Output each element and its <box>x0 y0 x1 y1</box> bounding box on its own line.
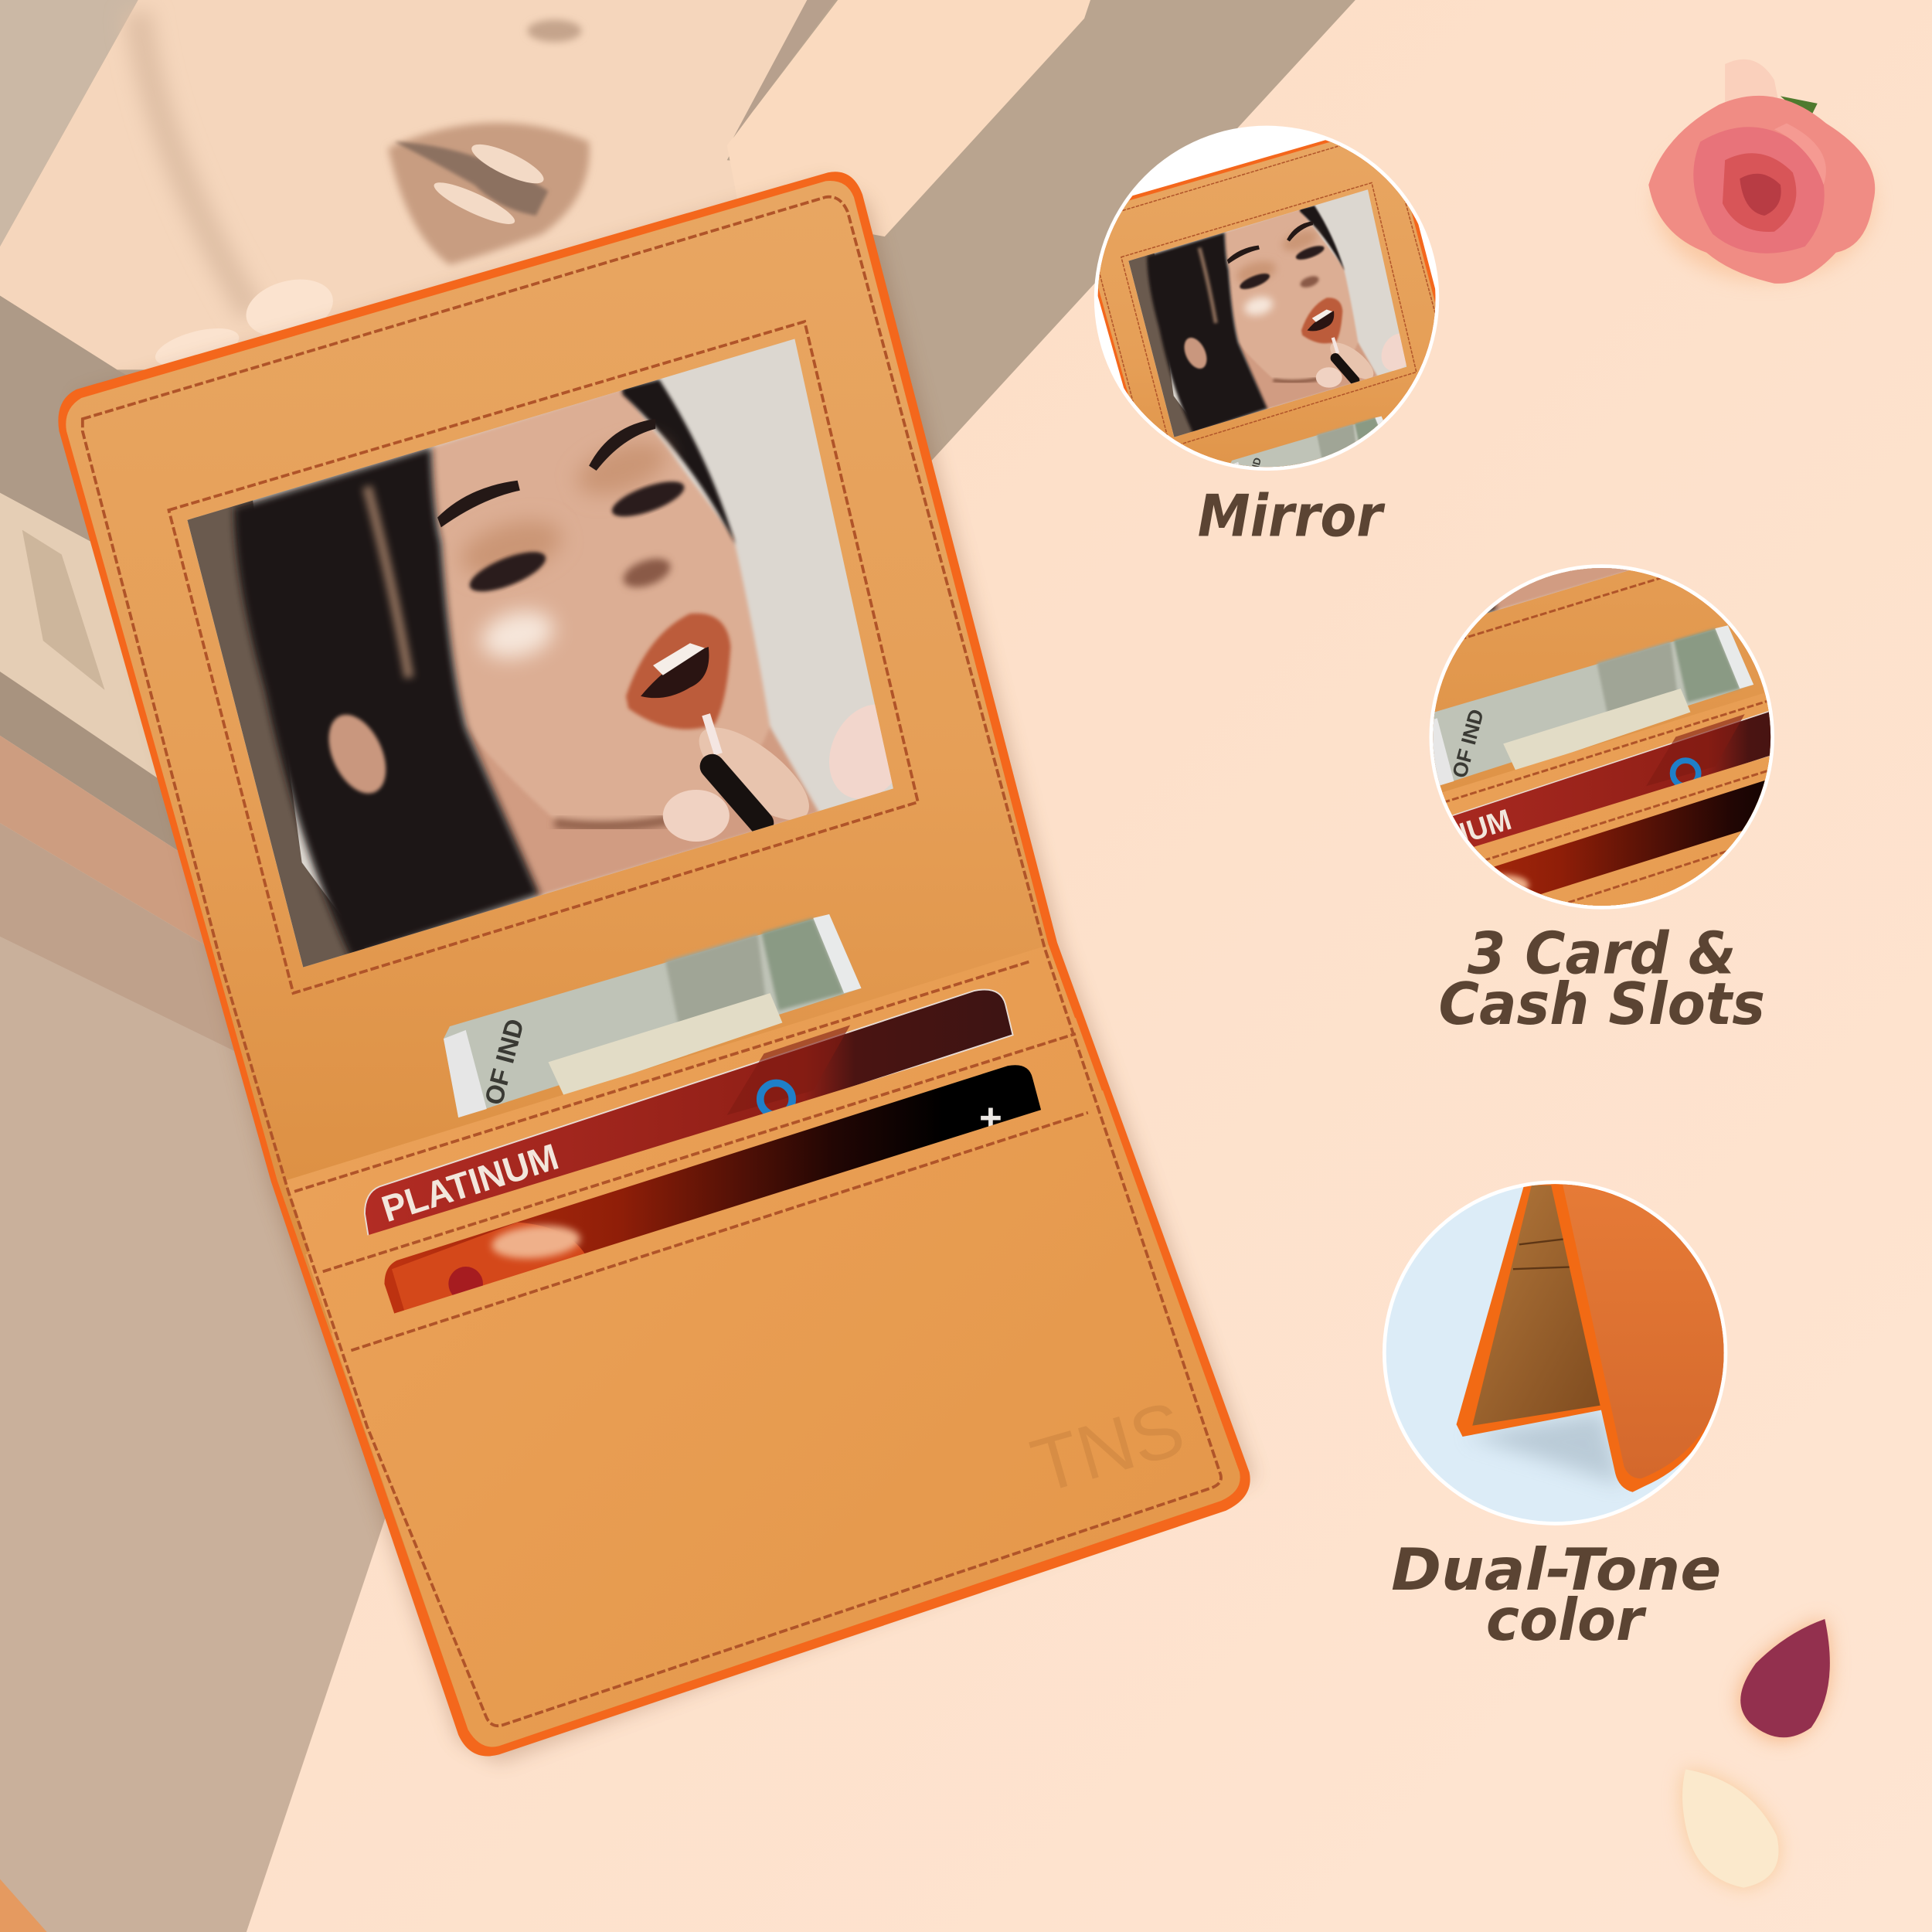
wallet stitching <box>83 197 1221 1726</box>
floor shadow <box>1466 1412 1621 1485</box>
feature label: card slots: Cash Slots <box>1438 970 1765 1038</box>
icon: maroon sponge <box>1739 1619 1830 1740</box>
outer flap <box>1550 1180 1727 1492</box>
platinum card <box>365 990 1013 1244</box>
inner flap <box>1456 1184 1601 1437</box>
feature circle: card slots <box>1430 564 1774 910</box>
upper pocket <box>286 945 1240 1730</box>
wallet shadow <box>77 180 1254 1762</box>
feature label: dual tone <box>1391 1536 1721 1654</box>
icon: rose <box>1648 60 1875 284</box>
front pocket <box>332 1090 1240 1747</box>
rupee note: OF IND <box>480 1016 530 1108</box>
wallet inner leather <box>66 181 1240 1747</box>
feature label: card slots: 3 Card & <box>1468 920 1736 988</box>
ghosted background photo <box>0 0 1355 1932</box>
black card <box>384 1065 1043 1321</box>
mirror photo <box>172 321 923 986</box>
wallet orange edge <box>58 172 1250 1756</box>
feature label: dual tone: Dual-Tone <box>1391 1536 1721 1604</box>
feature circle: mirror <box>1094 125 1439 471</box>
TNS emboss: TNS <box>1022 1385 1193 1509</box>
feature label: card slots <box>1438 920 1765 1038</box>
pocket stitching <box>294 961 1088 1350</box>
wallet <box>58 172 1250 1756</box>
mirror frame stitching <box>168 321 918 993</box>
rupee note <box>444 914 861 1117</box>
feature label: mirror: Mirror <box>1198 482 1386 550</box>
icon: cream sponge <box>1682 1770 1778 1888</box>
black card: + <box>979 1096 1002 1140</box>
feature label: dual tone: color <box>1486 1586 1647 1654</box>
platinum card: PLATINUM <box>377 1137 563 1230</box>
middle pocket <box>305 1018 1240 1730</box>
feature circle: dual tone <box>1380 1177 1731 1528</box>
